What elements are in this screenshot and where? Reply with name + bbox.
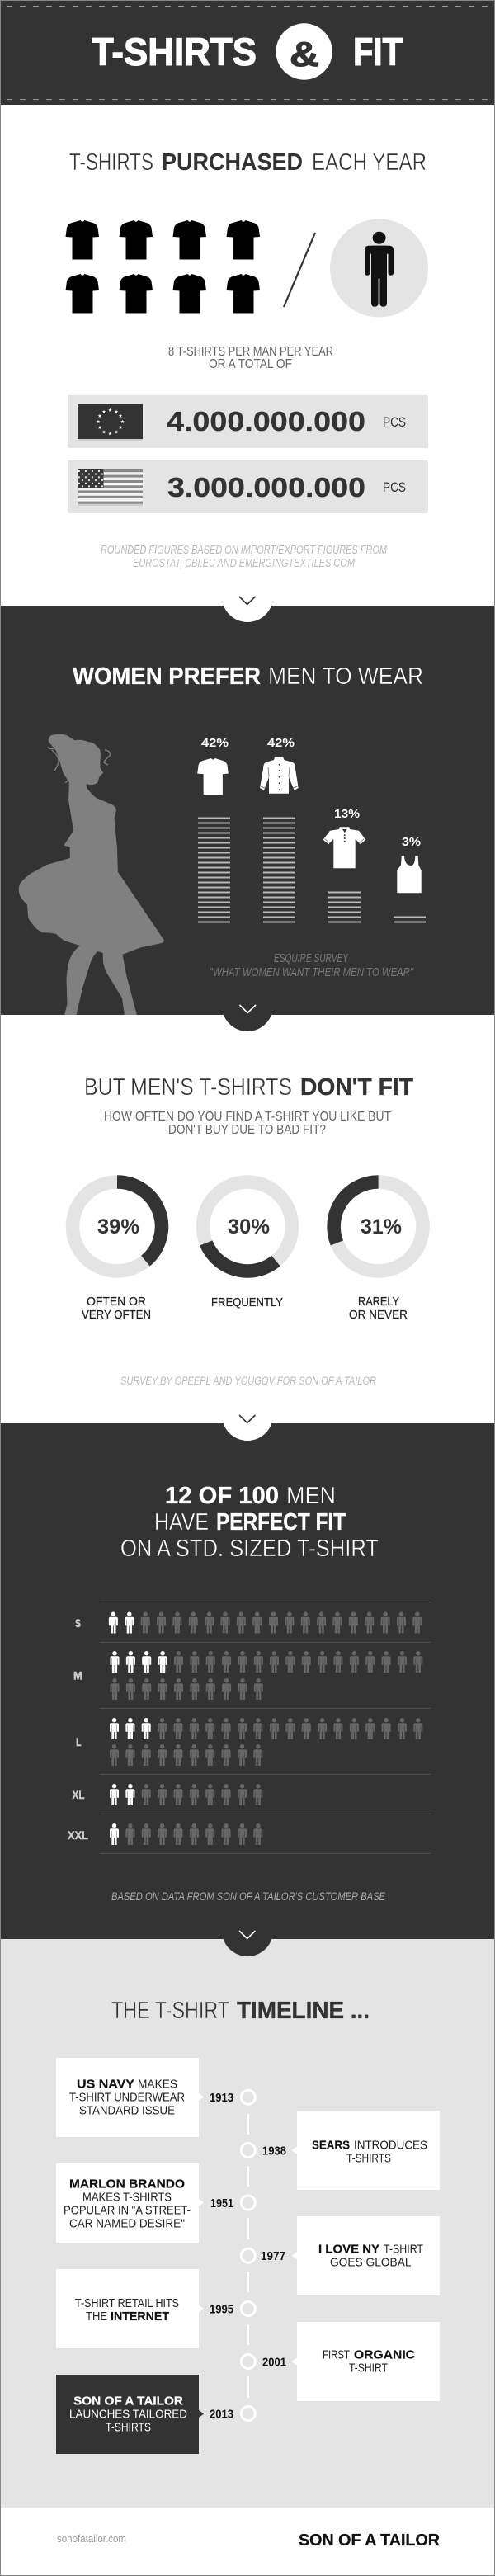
chart: donut 39%: 39% [97, 1215, 139, 1238]
panel: perfect fit [0, 1389, 495, 1939]
source note: esquire [210, 952, 414, 979]
illustration: woman silhouette [19, 734, 164, 1015]
event: 1995 the internet: T-SHIRT RETAIL HITS [75, 2296, 179, 2310]
event: 1995 the internet: INTERNET [111, 2309, 169, 2324]
panel: header [0, 0, 495, 105]
event: 2013 Son of a Tailor: T-SHIRTS [106, 2421, 151, 2434]
title: Fit: FIT [353, 30, 403, 73]
icon: man in circle [330, 219, 428, 317]
event: 2013 Son of a Tailor: SON OF A TAILOR [73, 2394, 183, 2408]
event: 1951 Marlon Brando: CAR NAMED DESIRE" [69, 2216, 185, 2231]
event: 1913 US Navy: US NAVY [77, 2078, 134, 2091]
source note [101, 544, 388, 570]
event: 1938 Sears: T-SHIRTS [346, 2152, 391, 2165]
stat: united states: 3.000.000.000 [167, 473, 365, 503]
chart: donut 39% [73, 1182, 162, 1322]
heading: women prefer men to wear: WOMEN PREFER [73, 663, 261, 690]
event: 1913 US Navy: MAKES [138, 2078, 177, 2091]
stat: europe: 4.000.000.000 [167, 407, 365, 437]
chart: donut 39%: VERY OFTEN [82, 1308, 151, 1322]
timeline axis [241, 2090, 255, 2421]
chart: clothing preference bars [197, 736, 426, 922]
source note: customer base: BASED ON DATA FROM SON OF A TAILOR'S CUSTOMER BASE [111, 1890, 386, 1903]
source note: survey: SURVEY BY OPEEPL AND YOUGOV FOR SON OF A TAILOR [120, 1374, 376, 1387]
heading: 12 of 100 men [120, 1483, 379, 1562]
row: size L: L [76, 1736, 81, 1748]
event: 1977 I Love NY [261, 2216, 440, 2295]
chart: donut 30%: FREQUENTLY [211, 1295, 283, 1309]
chart: fit by size pictogram [68, 1602, 431, 1853]
source note: esquire: "WHAT WOMEN WANT THEIR MEN TO WEAR" [210, 966, 414, 979]
bar: t-shirt 42% [197, 736, 230, 922]
row: size S [75, 1612, 422, 1634]
event: 1938 Sears [262, 2111, 440, 2190]
heading: purchased each year: T-SHIRTS [69, 149, 153, 176]
event: 1913 US Navy: 1913 [210, 2091, 233, 2105]
heading: purchased each year [69, 149, 427, 176]
bar: polo 13% [323, 807, 365, 922]
row: size XXL: XXL [68, 1829, 88, 1842]
row: size XXL [68, 1823, 262, 1845]
event: 2013 Son of a Tailor [56, 2375, 233, 2454]
bar: tank top 3%: 3% [402, 835, 421, 849]
text: per man per year: OR A TOTAL OF [209, 357, 292, 371]
event: 1938 Sears: SEARS [312, 2139, 350, 2152]
icon: ampersand badge: & [290, 35, 319, 73]
arrow: section down chevron [222, 571, 273, 622]
chart: donut 31%: RARELY [358, 1295, 399, 1309]
event: 2001 first organic: T-SHIRT [349, 2361, 388, 2375]
heading: women prefer men to wear: MEN TO WEAR [268, 663, 423, 690]
chart: donut 30% [203, 1182, 292, 1309]
event: 2001 first organic [262, 2322, 440, 2401]
icon: EU flag [78, 404, 143, 441]
event: 1913 US Navy: T-SHIRT UNDERWEAR [69, 2091, 185, 2104]
event: 1977 I Love NY: GOES GLOBAL [330, 2256, 411, 2269]
event: 1995 the internet: 1995 [210, 2302, 233, 2317]
heading: 12 of 100 men: MEN [286, 1483, 336, 1509]
heading: 12 of 100 men: 12 OF 100 [165, 1483, 279, 1509]
heading: 12 of 100 men: PERFECT FIT [216, 1509, 346, 1536]
icons: eight t-shirts [66, 220, 260, 314]
heading: purchased each year: EACH YEAR [312, 149, 427, 176]
row: size M [73, 1651, 422, 1700]
footer brand: SON OF A TAILOR [299, 2531, 441, 2550]
row: size L [76, 1718, 422, 1766]
icon: divider slash [284, 233, 315, 307]
icon: US flag [78, 469, 143, 506]
event: 2013 Son of a Tailor: LAUNCHES TAILORED [69, 2408, 187, 2421]
text: per man per year: 8 T-SHIRTS PER MAN PER YEAR [168, 345, 333, 359]
event: 1913 US Navy: STANDARD ISSUE [79, 2104, 175, 2117]
event: 1995 the internet: THE [86, 2309, 107, 2324]
icon: ampersand badge [276, 23, 332, 80]
panel: footer [0, 2508, 495, 2576]
panel: don't fit [0, 980, 495, 1423]
bar: t-shirt 42%: 42% [201, 736, 229, 750]
event: 2001 first organic: 2001 [262, 2355, 286, 2370]
panel: t-shirts purchased [66, 149, 428, 570]
bar: dress shirt 42%: 42% [267, 736, 295, 750]
event: 1951 Marlon Brando: MARLON BRANDO [69, 2177, 185, 2191]
bar: dress shirt 42% [260, 736, 299, 922]
bar: tank top 3% [394, 835, 426, 922]
event: 1951 Marlon Brando [56, 2163, 233, 2243]
text: per man per year [168, 345, 333, 371]
heading: but men's t-shirts don't fit: DON'T FIT [300, 1074, 413, 1101]
event: 1938 Sears: INTRODUCES [354, 2139, 427, 2152]
row: size XL [73, 1784, 262, 1805]
event: 1951 Marlon Brando: MAKES T-SHIRTS [82, 2190, 172, 2205]
event: 1951 Marlon Brando: POPULAR IN "A STREET- [64, 2203, 191, 2218]
text: survey question: HOW OFTEN DO YOU FIND A T-SHIRT YOU LIKE BUT [104, 1110, 391, 1124]
event: 1951 Marlon Brando: 1951 [210, 2196, 233, 2210]
panel: timeline [0, 1905, 495, 2508]
title: T-Shirts: T-SHIRTS [92, 30, 257, 73]
heading: purchased each year: PURCHASED [162, 149, 303, 176]
event: 1977 I Love NY: T-SHIRT [384, 2243, 423, 2256]
stat: united states: PCS [383, 480, 406, 495]
chart: donut 39%: OFTEN OR [87, 1295, 146, 1309]
row: size M: M [73, 1670, 82, 1682]
event: 1938 Sears: 1938 [262, 2144, 286, 2158]
heading: t-shirt timeline: THE T-SHIRT [111, 1998, 229, 2024]
bar: polo 13%: 13% [334, 807, 360, 821]
stat: united states [68, 460, 428, 513]
chart: donut 30%: 30% [228, 1215, 270, 1238]
heading: t-shirt timeline: TIMELINE ... [237, 1998, 370, 2024]
event: 1977 I Love NY: 1977 [261, 2249, 285, 2263]
source note: esquire: ESQUIRE SURVEY [274, 952, 349, 965]
arrow: section down chevron [222, 980, 273, 1031]
heading: but men's t-shirts don't fit: BUT MEN'S T-SHIRTS [84, 1074, 292, 1101]
event: 2013 Son of a Tailor: 2013 [210, 2408, 233, 2421]
event: 1977 I Love NY: I LOVE NY [318, 2243, 380, 2256]
footer url: sonofatailor.com [57, 2532, 126, 2545]
stat: europe: PCS [383, 415, 406, 430]
event: 2001 first organic: ORGANIC [354, 2348, 415, 2361]
heading: 12 of 100 men: ON A STD. SIZED T-SHIRT [120, 1536, 379, 1562]
heading: women prefer men to wear [73, 663, 423, 690]
heading: 12 of 100 men: HAVE [154, 1509, 209, 1536]
event: 2001 first organic: FIRST [323, 2348, 350, 2361]
arrow: section down chevron [222, 1905, 273, 1956]
source note: ROUNDED FIGURES BASED ON IMPORT/EXPORT FIGURES FROM [101, 544, 388, 557]
text: survey question: DON'T BUY DUE TO BAD FIT? [168, 1123, 326, 1137]
row: size XL: XL [73, 1789, 84, 1801]
event: 1995 the internet [56, 2269, 233, 2348]
chart: donut 31%: 31% [361, 1215, 402, 1238]
panel: women prefer [0, 571, 495, 1015]
row: size S: S [75, 1617, 81, 1630]
chart: donut 31% [334, 1182, 423, 1322]
event: 1913 US Navy [56, 2058, 233, 2137]
source note: EUROSTAT, CBI.EU AND EMERGINGTEXTILES.COM [133, 557, 356, 570]
chart: donut 31%: OR NEVER [349, 1308, 408, 1322]
arrow: section down chevron [222, 1389, 273, 1441]
stat: europe [68, 395, 428, 448]
heading: t-shirt timeline [111, 1998, 370, 2024]
text: survey question [104, 1110, 391, 1137]
